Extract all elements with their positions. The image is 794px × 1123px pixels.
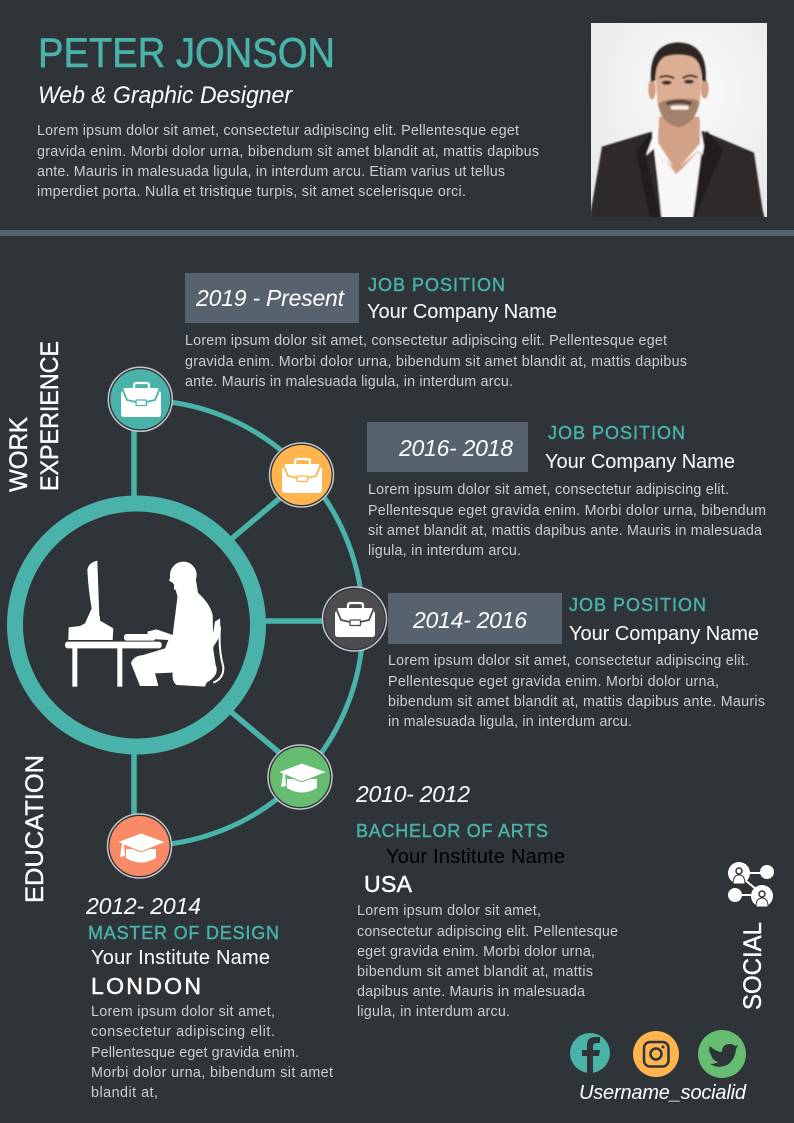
section label: social: SOCIAL	[739, 922, 767, 1010]
node: graduation cap coral	[108, 814, 172, 878]
job entry 2014: JOB POSITION	[569, 595, 706, 615]
job entry 2019: gravida enim. Morbi dolor urna, bibendum sit amet blandit at, mattis dapibus	[185, 354, 687, 370]
section label: work experience	[5, 341, 64, 492]
icon: social network	[728, 862, 774, 907]
education entry 2012: LONDON	[91, 973, 201, 999]
header: intro text: Lorem ipsum dolor sit amet, consectetur adipiscing elit. Pellentesque eget	[37, 123, 519, 139]
education entry 2012: consectetur adipiscing elit.	[91, 1024, 275, 1040]
education entry 2012	[85, 893, 333, 1101]
job entry 2019: JOB POSITION	[368, 275, 505, 295]
job entry 2014: bibendum sit amet blandit at, mattis dapibus ante. Mauris	[388, 694, 765, 710]
social username: Username_socialid	[579, 1082, 747, 1104]
node: briefcase teal	[108, 367, 172, 431]
education entry 2012: Morbi dolor urna, bibendum sit amet	[91, 1065, 333, 1081]
job entry 2014	[388, 593, 765, 730]
node: graduation cap green	[268, 745, 332, 809]
education entry 2010	[355, 781, 618, 1020]
education entry 2010: dapibus ante. Mauris in malesuada	[357, 984, 585, 1000]
job entry 2016	[367, 422, 766, 559]
header: intro text: ante. Mauris in malesuada ligula, in interdum arcu. Etiam varius ut tellus	[37, 164, 505, 180]
job entry 2019: ante. Mauris in malesuada ligula, in interdum arcu.	[185, 374, 513, 390]
education entry 2010: ligula, in interdum arcu.	[357, 1004, 510, 1020]
job entry 2016: sit amet blandit at, mattis dapibus ante. Mauris in malesuada	[368, 523, 762, 539]
education entry 2012: Your Institute Name	[91, 947, 270, 969]
job entry 2014: Lorem ipsum dolor sit amet, consectetur adipiscing elit.	[388, 653, 749, 669]
education entry 2012: MASTER OF DESIGN	[88, 923, 279, 943]
connector spokes	[134, 425, 325, 825]
header: intro text: imperdiet porta. Nulla et tristique turpis, sit amet scelerisque orci.	[37, 184, 466, 200]
divider bar	[0, 230, 794, 236]
education entry 2010: Your Institute Name	[386, 846, 565, 868]
header: intro text: gravida enim. Morbi dolor urna, bibendum sit amet blandit at, mattis dapibus	[37, 144, 539, 160]
portrait photo	[588, 23, 767, 227]
node: briefcase grey	[322, 587, 386, 651]
job entry 2016: Your Company Name	[545, 451, 735, 473]
education entry 2012: Lorem ipsum dolor sit amet,	[91, 1004, 275, 1020]
job entry 2016: Lorem ipsum dolor sit amet, consectetur adipiscing elit.	[368, 482, 729, 498]
job entry 2014: 2014- 2016	[412, 607, 527, 633]
job entry 2016: ligula, in interdum arcu.	[368, 543, 521, 559]
education entry 2012: blandit at,	[91, 1085, 158, 1101]
education entry 2012: Pellentesque eget gravida enim.	[91, 1045, 299, 1061]
education entry 2010: USA	[364, 871, 413, 897]
job entry 2014: in malesuada ligula, in interdum arcu.	[388, 714, 632, 730]
connector arc	[140, 400, 363, 846]
education entry 2010: eget gravida enim. Morbi dolor urna,	[357, 944, 595, 960]
section label: work experience: EXPERIENCE	[36, 341, 64, 491]
central ring	[15, 504, 258, 746]
education entry 2010: 2010- 2012	[355, 781, 470, 807]
education entry 2012: 2012- 2014	[85, 893, 201, 919]
header: intro text	[37, 123, 539, 200]
icon: facebook	[570, 1033, 610, 1073]
icon: twitter	[698, 1030, 746, 1078]
education entry 2010: BACHELOR OF ARTS	[356, 821, 548, 841]
icon: instagram	[633, 1031, 679, 1077]
job entry 2016: JOB POSITION	[548, 423, 685, 443]
education entry 2010: Lorem ipsum dolor sit amet,	[357, 903, 541, 919]
job entry 2014: Your Company Name	[569, 623, 759, 645]
job entry 2019: Your Company Name	[367, 301, 557, 323]
job entry 2014: Pellentesque eget gravida enim. Morbi dolor urna,	[388, 674, 719, 690]
job entry 2019: Lorem ipsum dolor sit amet, consectetur adipiscing elit. Pellentesque eget	[185, 333, 667, 349]
education entry 2010: consectetur adipiscing elit. Pellentesque	[357, 924, 618, 940]
section label: work experience: WORK	[5, 417, 33, 492]
timeline diagram	[15, 367, 386, 878]
icon: person at computer	[65, 561, 223, 687]
education entry 2010: bibendum sit amet blandit at, mattis	[357, 964, 593, 980]
node: briefcase orange	[270, 443, 334, 507]
job entry 2016: Pellentesque eget gravida enim. Morbi dolor urna, bibendum	[368, 503, 766, 519]
section label: education: EDUCATION	[21, 755, 49, 903]
job entry 2019	[185, 273, 687, 390]
header: job title: Web & Graphic Designer	[38, 82, 293, 109]
job entry 2016: 2016- 2018	[398, 435, 513, 461]
job entry 2019: 2019 - Present	[195, 285, 346, 311]
header: name: PETER JONSON	[38, 29, 335, 76]
